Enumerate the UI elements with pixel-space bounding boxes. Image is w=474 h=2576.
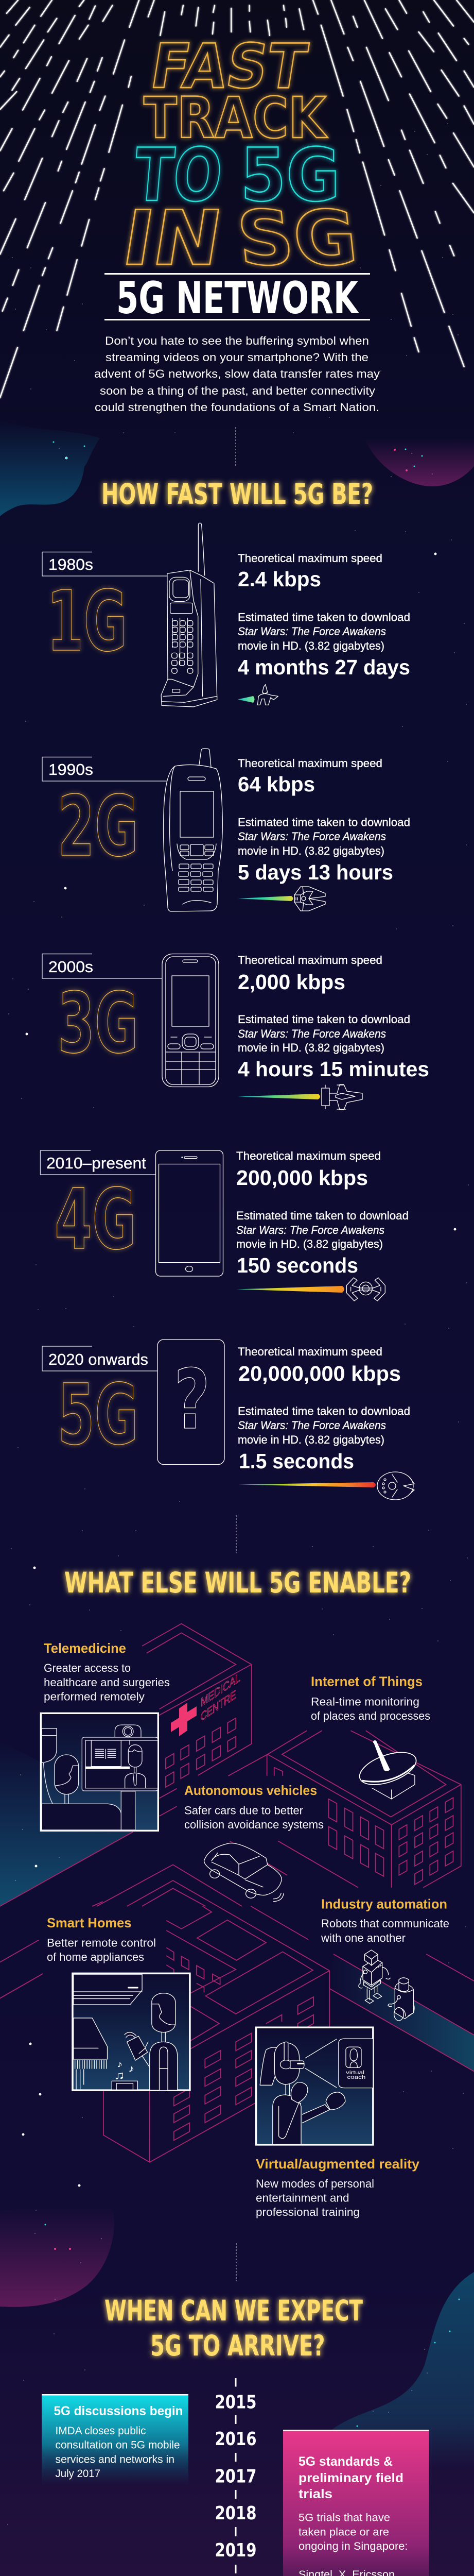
speed stats: 1G: 4 months 27 days — [238, 655, 410, 679]
speed stats: 5G: Theoretical maximum speed — [238, 1345, 382, 1358]
title line: TO: TO — [131, 132, 226, 218]
speed stats: 5G: movie in HD. (3.82 gigabytes) — [238, 1433, 384, 1446]
service text: Autonomous vehicles — [184, 1783, 324, 1831]
speed stats: 4G: Theoretical maximum speed — [236, 1149, 381, 1162]
timeline card: 5G standards and field trials: trials — [299, 2487, 332, 2501]
service text: Virtual/augmented reality: professional training — [256, 2206, 360, 2218]
timeline card: 5G standards and field trials: ongoing in Singapore: — [299, 2540, 408, 2552]
dashed connector to timeline section — [236, 2243, 237, 2281]
speed stats: 1G: Estimated time taken to download — [238, 611, 410, 623]
title: Fast Track to 5G in SG — [116, 31, 362, 282]
service text: Autonomous vehicles: Autonomous vehicles — [184, 1783, 317, 1798]
speed stats: 5G: Star Wars: The Force Awakens — [238, 1419, 386, 1432]
illustration: smart home control — [73, 1973, 190, 2090]
intro paragraph: soon be a thing of the past, and better connectivity — [100, 384, 375, 397]
speed stats: 4G: Estimated time taken to download — [236, 1209, 409, 1222]
speed stats: 3G: 4 hours 15 minutes — [238, 1057, 429, 1081]
intro paragraph: Don’t you hate to see the buffering symbol when — [105, 334, 369, 347]
speed stats: 1G: Theoretical maximum speed — [238, 552, 382, 565]
service text: Smart Homes: of home appliances — [47, 1951, 144, 1963]
illustration: virtual reality boxing — [256, 2027, 373, 2145]
era label: 1980s: 1980s — [48, 555, 93, 573]
heading: When can we expect 5G to arrive: 5G TO ARRIVE? — [150, 2329, 325, 2362]
speed stats: 1G: 2.4 kbps — [238, 567, 321, 591]
hyperspace star streaks — [0, 0, 474, 398]
service text: Telemedicine — [44, 1640, 170, 1703]
service text: Autonomous vehicles: collision avoidance systems — [184, 1818, 324, 1831]
isometric city line art — [0, 1624, 474, 2162]
title line: 5G: 5G — [240, 133, 340, 218]
generation panel: 2G 1990s — [42, 749, 410, 911]
service text: Smart Homes — [47, 1915, 156, 1963]
service text: Internet of Things: Real-time monitoring — [311, 1695, 419, 1708]
era label: 1990s — [42, 757, 167, 781]
era label: 1980s — [42, 552, 167, 576]
illustration: virtual reality boxing: virtual — [346, 2069, 364, 2075]
generation panel: 1G 1980s — [42, 523, 410, 707]
icon: feature phone — [162, 954, 219, 1087]
illustration: telemedicine consultation — [41, 1713, 158, 1831]
service text: Virtual/augmented reality — [256, 2156, 420, 2218]
timeline card: 5G standards and field trials: 5G standards & — [299, 2454, 393, 2469]
service text: Industry automation — [321, 1896, 449, 1944]
icon: smartphone — [155, 1150, 223, 1276]
speed stats: 4G: movie in HD. (3.82 gigabytes) — [236, 1238, 383, 1250]
generation panel: 4G 2010-present — [40, 1149, 409, 1301]
timeline card: 5G discussions begin: consultation on 5G mobile — [56, 2439, 180, 2451]
rocket trail and X-wing: 3G — [238, 1084, 362, 1110]
subtitle: 5G Network between rules: 5G NETWORK — [116, 273, 359, 324]
icon: medical cross — [171, 1703, 197, 1736]
speed stats: 5G: Estimated time taken to download — [238, 1404, 410, 1418]
heading: How fast will 5G be: HOW FAST WILL 5G BE? — [101, 478, 373, 511]
title line: TRACK: TRACK — [144, 85, 328, 151]
speed stats: 3G: movie in HD. (3.82 gigabytes) — [238, 1041, 384, 1054]
timeline card: 5G standards and field trials: taken place or are — [299, 2527, 389, 2538]
years — [215, 2392, 256, 2576]
speed stats: 5G: 20,000,000 kbps — [238, 1362, 401, 1385]
rocket trail and Millennium Falcon: 5G — [238, 1472, 414, 1500]
timeline card: 5G standards and field trials: 5G trials that have — [299, 2512, 390, 2523]
speed stats: 3G: 2,000 kbps — [238, 970, 345, 994]
speed stats: 2G: Star Wars: The Force Awakens — [238, 830, 386, 843]
years: 2018 — [215, 2503, 256, 2524]
service text: Smart Homes: Smart Homes — [47, 1915, 132, 1930]
icon: satellite dish — [354, 1740, 422, 1799]
service text: Telemedicine: Telemedicine — [44, 1640, 126, 1656]
timeline card: 5G standards and field trials — [283, 2430, 429, 2576]
timeline — [215, 2378, 256, 2576]
speed stats: 2G: Theoretical maximum speed — [238, 757, 382, 770]
speed stats: 3G: Star Wars: The Force Awakens — [238, 1027, 386, 1040]
timeline card: 5G discussions begin — [42, 2394, 188, 2486]
speed stats: 1G — [238, 552, 410, 679]
nebula: teal wave bottom right — [329, 2272, 474, 2473]
icon: unknown future phone: ? — [174, 1351, 210, 1448]
intro paragraph — [94, 334, 380, 414]
service text: Virtual/augmented reality: Virtual/augmented reality — [256, 2156, 420, 2172]
speed stats: 2G: 5 days 13 hours — [238, 860, 393, 884]
service text: Internet of Things — [311, 1673, 430, 1722]
title line: FAST: FAST — [146, 31, 312, 103]
speed stats: 3G: Theoretical maximum speed — [238, 954, 382, 967]
service text: Telemedicine: performed remotely — [44, 1690, 145, 1703]
service text: Telemedicine: healthcare and surgeries — [44, 1676, 170, 1689]
speed stats: 4G — [236, 1149, 409, 1277]
nebula: teal glow left of services — [0, 1741, 133, 1906]
intro paragraph: could strengthen the foundations of a Smart Nation. — [95, 401, 379, 414]
outlined label: 4G: 4G — [55, 1172, 136, 1268]
years: 2017 — [215, 2466, 256, 2487]
outlined label: 5G: 5G — [58, 1367, 138, 1464]
building: smart homes tower — [0, 1902, 474, 2162]
speed stats: 2G — [238, 757, 410, 884]
era label: 2000s: 2000s — [48, 958, 93, 976]
timeline ticks — [235, 2378, 237, 2576]
speed stats: 5G — [238, 1345, 410, 1473]
generation panel: 3G 2000s — [42, 954, 429, 1110]
service text: Industry automation: Industry automation — [321, 1896, 447, 1911]
service text: Smart Homes: Better remote control — [47, 1936, 156, 1950]
title line: IN: IN — [116, 195, 228, 282]
timeline card: 5G discussions begin: 5G discussions begin — [54, 2404, 183, 2418]
heading: When can we expect 5G to arrive — [104, 2294, 363, 2362]
era label: 2010-present — [40, 1150, 155, 1175]
service text: Internet of Things: of places and processes — [311, 1709, 430, 1722]
building: medical centre — [0, 1624, 252, 1906]
timeline card: 5G discussions begin: services and networks in — [56, 2453, 174, 2466]
service text: Autonomous vehicles: Safer cars due to better — [184, 1804, 303, 1817]
dashed connector to speed section — [235, 427, 236, 466]
rocket trail and TIE fighter: 4G — [236, 1278, 385, 1301]
heading: When can we expect 5G to arrive: WHEN CAN WE EXPECT — [104, 2294, 363, 2327]
dashed connector to services section — [236, 1515, 237, 1553]
speed stats: 4G: Star Wars: The Force Awakens — [236, 1224, 384, 1236]
nebula: pink blob bottom left — [0, 2205, 114, 2307]
timeline card: 5G discussions begin: IMDA closes public — [56, 2425, 146, 2437]
speed stats: 1G: Star Wars: The Force Awakens — [238, 625, 386, 638]
illustration: smart home control: ♪ — [117, 2059, 122, 2070]
speed stats: 2G: 64 kbps — [238, 772, 315, 796]
years: 2015 — [215, 2392, 256, 2413]
building: IoT block — [97, 1731, 461, 1906]
sign: medical centre: MEDICAL — [201, 1670, 240, 1709]
years: 2019 — [215, 2540, 256, 2561]
era label: 2020 onwards — [42, 1346, 157, 1371]
intro paragraph: streaming videos on your smartphone? With the — [106, 351, 368, 364]
timeline card: 5G standards and field trials: preliminary field — [299, 2471, 403, 2485]
speed stats: 5G: 1.5 seconds — [239, 1449, 354, 1473]
years: 2016 — [215, 2429, 256, 2450]
speed stats: 2G: Estimated time taken to download — [238, 816, 410, 828]
outlined label: 2G: 2G — [58, 778, 138, 875]
speed stats: 3G — [238, 954, 429, 1081]
icon: autonomous car — [204, 1843, 284, 1902]
service text: Virtual/augmented reality: New modes of personal — [256, 2177, 374, 2190]
road band — [329, 1954, 474, 2072]
icon: robots — [359, 1950, 414, 2021]
illustration: virtual reality boxing: coach — [347, 2074, 365, 2080]
era label: 2000s — [42, 954, 162, 978]
speed stats: 4G: 150 seconds — [237, 1253, 358, 1277]
service text: Internet of Things: Internet of Things — [311, 1673, 423, 1689]
illustration: smart home control: ♪ — [128, 2063, 134, 2074]
intro paragraph: advent of 5G networks, slow data transfer rates may — [94, 367, 380, 380]
sign: medical centre: CENTRE — [201, 1687, 236, 1724]
nebula: pink blob top right — [364, 438, 474, 486]
rocket trail and rider icon: 1G — [238, 685, 278, 705]
outlined label: 3G: 3G — [58, 975, 138, 1072]
speed stats: 2G: movie in HD. (3.82 gigabytes) — [238, 844, 384, 857]
service text: Telemedicine: Greater access to — [44, 1662, 131, 1674]
speed stats: 3G: Estimated time taken to download — [238, 1013, 410, 1026]
outlined label: 1G: 1G — [47, 573, 127, 670]
service text: Industry automation: Robots that communicate — [321, 1917, 449, 1930]
nebula: teal blob top left — [0, 420, 100, 516]
era label: 2010-present: 2010–present — [46, 1154, 146, 1172]
service text: Industry automation: with one another — [321, 1931, 406, 1944]
icon: candybar phone — [164, 749, 222, 911]
service text: Virtual/augmented reality: entertainment and — [256, 2192, 349, 2204]
era label: 2020 onwards: 2020 onwards — [48, 1350, 148, 1368]
era label: 1990s: 1990s — [48, 760, 93, 778]
title line: SG: SG — [233, 194, 362, 282]
icon: brick phone — [161, 523, 217, 707]
speed stats: 4G: 200,000 kbps — [236, 1166, 368, 1190]
generation panel: 5G 2020 onwards — [42, 1340, 414, 1500]
icon: unknown future phone — [157, 1340, 224, 1464]
timeline card: 5G discussions begin: July 2017 — [56, 2468, 100, 2480]
speed stats: 1G: movie in HD. (3.82 gigabytes) — [238, 639, 384, 652]
illustration: smart home control: ♫ — [114, 2069, 125, 2082]
rocket trail and star fighter: 2G — [238, 887, 325, 911]
